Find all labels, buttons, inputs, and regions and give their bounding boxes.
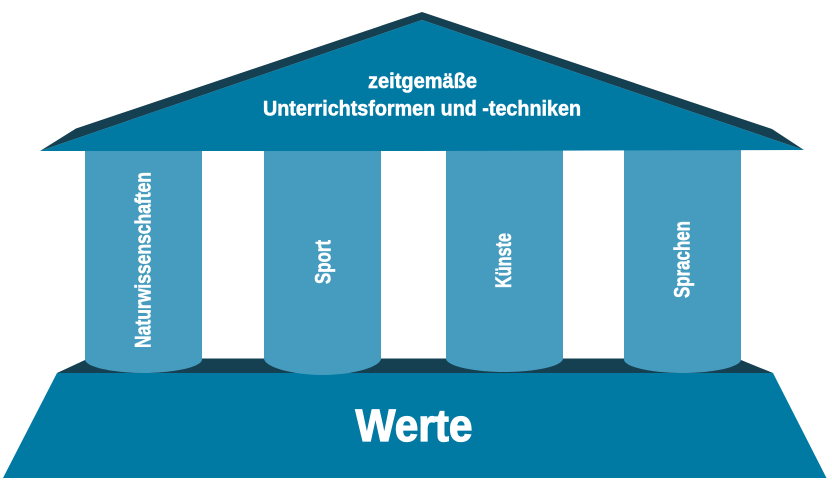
roof text: Unterrichtsformen und -techniken <box>263 98 581 120</box>
roof <box>40 12 804 151</box>
base: Werte <box>3 358 826 478</box>
pillar: Naturwissenschaften: Naturwissenschaften <box>130 172 156 348</box>
pillar: Sprachen: Sprachen <box>670 221 694 298</box>
pillar: Naturwissenschaften <box>85 150 202 373</box>
base: Werte: Werte <box>356 400 472 451</box>
pillar: Künste: Künste <box>491 233 516 288</box>
pillar: Künste <box>446 150 563 372</box>
pillar: Sport <box>264 150 381 375</box>
roof text: zeitgemäße <box>368 70 477 93</box>
pillar: Sprachen <box>624 150 741 373</box>
pillar: Sport: Sport <box>310 239 336 284</box>
roof text <box>263 70 581 120</box>
